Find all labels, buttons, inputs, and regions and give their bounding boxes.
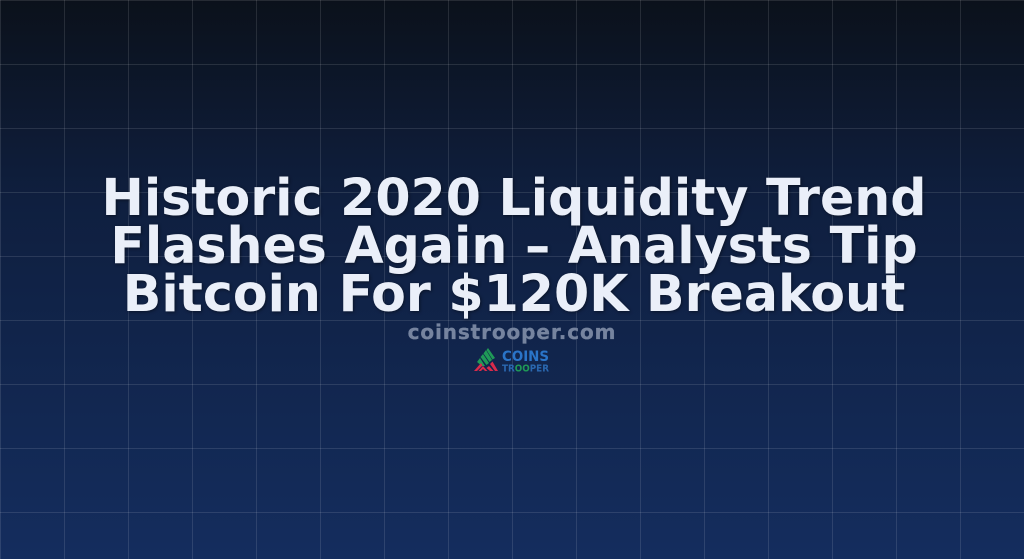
title: Bitcoin For $120K Breakout xyxy=(123,264,905,323)
wordmark: COINS: COINS xyxy=(502,349,549,365)
title: Flashes Again – Analysts Tip xyxy=(110,216,918,275)
title xyxy=(101,168,926,323)
title: Historic 2020 Liquidity Trend xyxy=(101,168,926,227)
source website: coinstrooper.com xyxy=(408,320,616,344)
logo: Coins Trooper xyxy=(474,348,550,374)
icon: green and red rising bars xyxy=(474,348,498,371)
